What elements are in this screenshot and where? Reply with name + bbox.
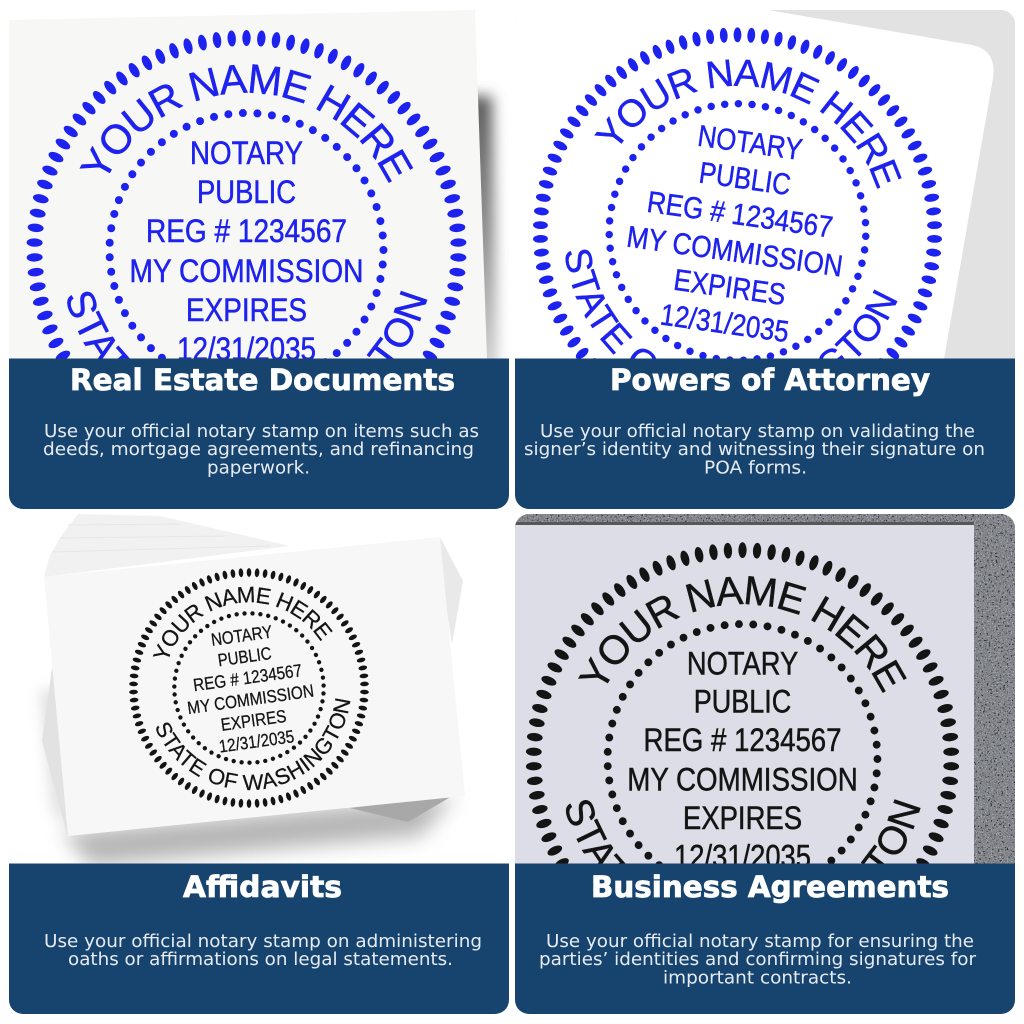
description [539,931,977,989]
panel: Real Estate Documents [9,10,509,509]
stamp: large black notary seal [526,542,960,864]
photo: blue stamp on paper [9,10,504,358]
heading: Business Agreements [591,870,949,904]
description: parties’ identities and confirming signatures for [539,949,977,970]
description: deeds, mortgage agreements, and refinancing [43,439,474,460]
stamp: black notary seal on card: EXPIRES [220,706,288,735]
stamp: blue notary seal: YOUR NAME HERE [80,64,414,183]
stamp: large black notary seal: 12/31/2035 [674,838,811,874]
stamp: tilted blue notary seal: NOTARY [696,120,804,167]
stamp: tilted blue notary seal [533,27,942,358]
stamp: tilted blue notary seal: 12/31/2035 [658,299,791,349]
panel: Powers of Attorney [515,10,1015,509]
description: Use your official notary stamp for ensuring the [546,931,974,952]
description: important contracts. [663,968,852,989]
description [44,931,482,970]
heading: Real Estate Documents [70,363,455,397]
stamp: tilted blue notary seal: MY COMMISSION [625,221,845,284]
stamp: large black notary seal: EXPIRES [683,800,802,836]
stamp: large black notary seal: REG # 1234567 [644,722,841,758]
stamp: black notary seal on card: MY COMMISSION [186,681,315,718]
description: paperwork. [207,458,310,478]
description [43,421,479,478]
stamp: large black notary seal: YOUR NAME HERE [578,576,907,693]
description [524,421,985,478]
stamp: large black notary seal: PUBLIC [694,684,791,720]
description: Use your official notary stamp on items such as [44,421,479,442]
description: oaths or affirmations on legal statements. [68,949,453,970]
stamp: black notary seal on card: STATE OF WASHINGTON [156,698,350,790]
stamp: black notary seal on card: YOUR NAME HERE [152,586,333,657]
caption box: Powers of Attorney [515,358,1015,509]
panel: Affidavits [9,514,509,1014]
stamp: blue notary seal: NOTARY [190,135,303,171]
stamp: blue notary seal: PUBLIC [197,174,296,210]
stamp: black notary seal on card: REG # 1234567 [192,660,303,695]
panel: Business Agreements [515,514,1015,1014]
description: POA forms. [704,458,807,478]
caption box: Business Agreements [515,864,1015,1014]
heading: Powers of Attorney [610,363,930,397]
stamp: tilted blue notary seal: STATE OF WASHINGTON [565,250,898,358]
stamp: blue notary seal: EXPIRES [186,292,307,328]
stamp: tilted blue notary seal: REG # 1234567 [645,186,835,245]
photo: stack of stamped cards [37,514,463,864]
stamp: large black notary seal: NOTARY [687,645,798,681]
caption box: Real Estate Documents [9,358,509,509]
stamp: blue notary seal: MY COMMISSION [130,253,364,289]
stamp: blue notary seal: 12/31/2035 [177,331,316,367]
photo: tilted blue stamp on white card [533,10,1015,358]
stamp: blue notary seal: REG # 1234567 [146,213,347,249]
caption box: Affidavits [9,864,509,1014]
stamp: tilted blue notary seal: PUBLIC [697,157,793,202]
heading: Affidavits [183,870,342,904]
stamp: tilted blue notary seal: EXPIRES [672,264,788,312]
photo: black stamp on paper over granite [515,514,1015,864]
stamp: black notary seal on card: PUBLIC [216,643,273,670]
description: Use your official notary stamp on validating the [540,421,975,442]
stamp: large black notary seal: MY COMMISSION [627,762,858,798]
stamp: black notary seal on card [129,568,369,808]
description: Use your official notary stamp on administering [44,931,482,952]
stamp: tilted blue notary seal: YOUR NAME HERE [594,59,902,189]
stamp: black notary seal on card: 12/31/2035 [218,726,296,757]
stamp: large black notary seal: STATE OF WASHINGTON [566,799,921,864]
description: signer’s identity and witnessing their signature on [524,439,985,460]
stamp: blue notary seal [26,30,466,358]
stamp: blue notary seal: STATE OF WASHINGTON [67,290,428,358]
stamp: black notary seal on card: NOTARY [210,621,274,650]
